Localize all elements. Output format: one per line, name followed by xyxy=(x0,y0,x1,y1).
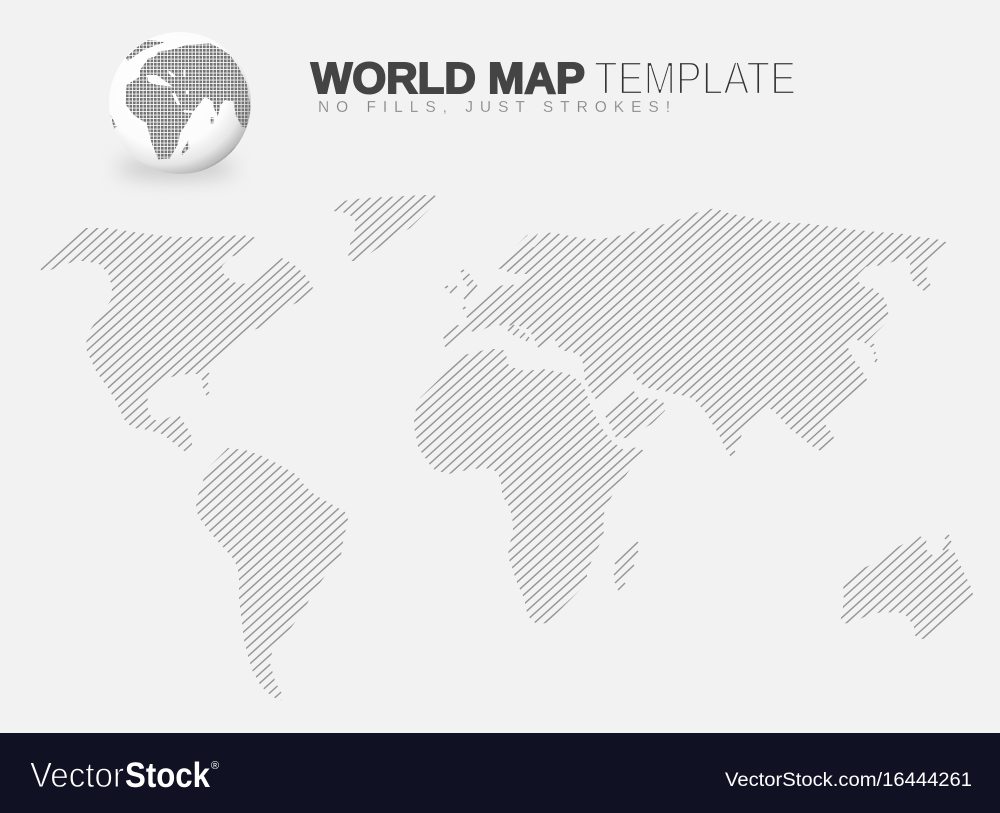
globe dotted land xyxy=(110,40,252,159)
footer image id: VectorStock.com/16444261 xyxy=(725,770,972,791)
globe dark edge xyxy=(109,32,251,174)
globe sphere xyxy=(109,32,251,174)
globe icon with dotted continents xyxy=(109,32,252,178)
footer logo: Stock xyxy=(125,756,210,795)
island: Madagascar xyxy=(614,542,638,590)
footer bar xyxy=(0,733,1000,813)
subtitle: NO FILLS, JUST STROKES! xyxy=(318,99,670,116)
title xyxy=(311,52,796,104)
hatched world map xyxy=(39,195,973,701)
continent: Australia xyxy=(840,536,973,640)
continent: Africa xyxy=(414,349,644,624)
title light part: TEMPLATE xyxy=(594,52,796,104)
title bold part: WORLD MAP xyxy=(311,54,585,103)
island: Papua tips xyxy=(943,535,951,550)
continent: South America xyxy=(196,448,348,701)
footer logo xyxy=(30,756,219,795)
continent: Eurasia xyxy=(443,208,948,458)
region: Arabia xyxy=(606,391,665,438)
footer logo: ® xyxy=(211,760,219,772)
islands: Caribbean xyxy=(202,373,209,395)
footer logo: Vector xyxy=(30,756,124,795)
continent: Greenland xyxy=(333,195,440,261)
globe drop shadow xyxy=(116,158,236,178)
continent: North America xyxy=(39,228,313,453)
islands: Europe, Italy and Japan xyxy=(445,270,877,362)
